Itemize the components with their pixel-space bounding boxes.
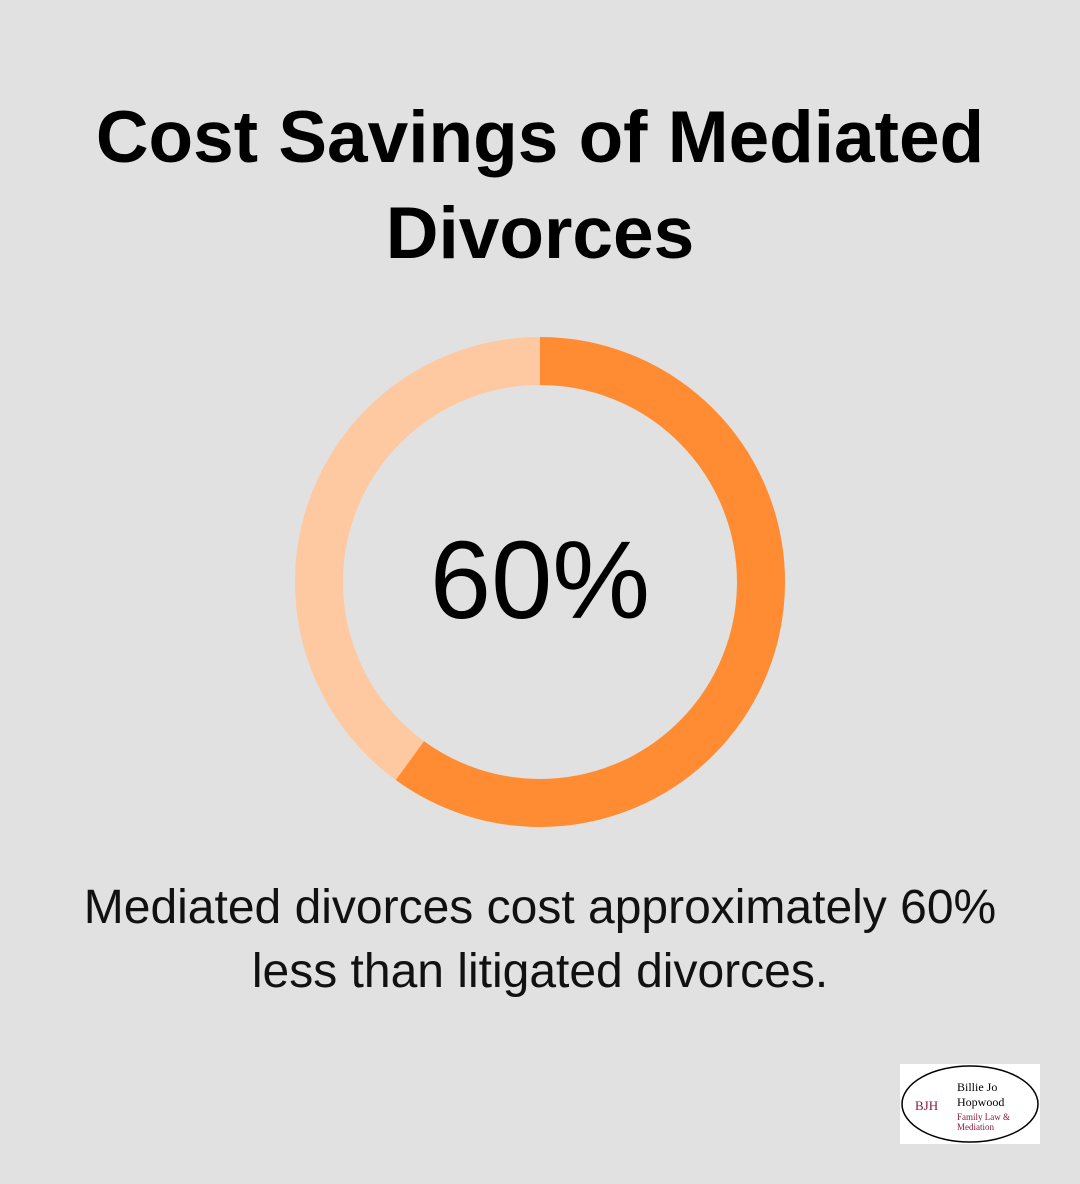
logo [900,1064,1040,1144]
title: Cost Savings of Mediated [96,97,984,178]
description: Mediated divorces cost approximately 60% [84,881,996,934]
title [96,97,984,274]
title: Divorces [386,193,694,274]
logo: Billie Jo [957,1080,997,1094]
description: less than litigated divorces. [252,945,828,998]
logo: Mediation [957,1122,994,1132]
logo: Family Law & [957,1112,1010,1122]
description [84,881,996,998]
donut chart: 60% [430,519,650,642]
logo: Hopwood [957,1095,1004,1109]
logo: BJH [915,1098,938,1113]
donut chart [295,337,785,827]
